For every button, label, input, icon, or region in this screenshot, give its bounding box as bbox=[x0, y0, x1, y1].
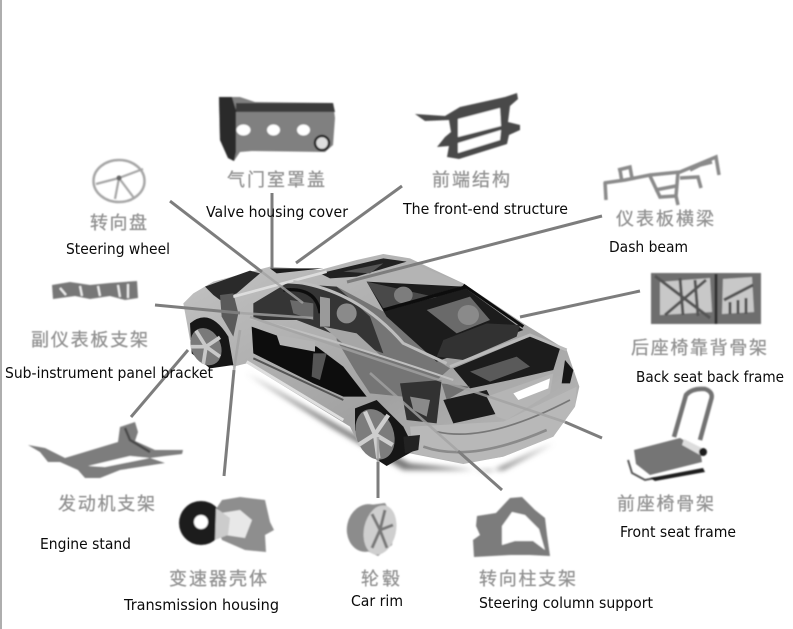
label: dash beam en: Dash beam bbox=[609, 238, 688, 256]
tail light bbox=[443, 390, 498, 423]
trunk opening bbox=[453, 337, 560, 388]
label: dash beam zh: 仪表板横梁 bbox=[616, 209, 714, 229]
licence plate bbox=[513, 378, 550, 400]
engine bay bbox=[205, 271, 260, 300]
glass pillar bbox=[293, 282, 447, 363]
rear wheel bbox=[349, 400, 420, 466]
label: engine stand zh: 发动机支架 bbox=[58, 494, 155, 514]
ground shadow bbox=[247, 373, 553, 472]
side glass tone bbox=[337, 287, 450, 397]
label: front-end structure en: The front-end structure bbox=[402, 200, 568, 218]
label: steering wheel zh: 转向盘 bbox=[90, 213, 147, 233]
car cutaway illustration bbox=[183, 254, 579, 472]
label: car rim zh: 轮毂 bbox=[361, 569, 400, 589]
label: car rim en: Car rim bbox=[351, 592, 403, 610]
rear cabin interior bbox=[367, 282, 523, 362]
label: steering column support zh: 转向柱支架 bbox=[479, 569, 576, 589]
part: dash beam bbox=[604, 157, 719, 205]
label: steering column support en: Steering column support bbox=[479, 594, 653, 612]
sunroof bbox=[320, 258, 407, 278]
label: valve housing cover zh: 气门室罩盖 bbox=[227, 170, 325, 190]
part: sub-instrument panel bracket bbox=[52, 281, 138, 300]
label: transmission housing zh: 变速器壳体 bbox=[169, 569, 267, 589]
label: front seat frame zh: 前座椅骨架 bbox=[617, 494, 714, 514]
label: front-end structure zh: 前端结构 bbox=[432, 170, 510, 190]
label: steering wheel en: Steering wheel bbox=[66, 240, 170, 258]
part: car rim bbox=[342, 500, 401, 558]
rear bumper bbox=[410, 387, 577, 463]
rear wheel arch components bbox=[400, 380, 442, 423]
label: front seat frame en: Front seat frame bbox=[620, 523, 736, 541]
leader lines bbox=[131, 186, 640, 498]
label: engine stand en: Engine stand bbox=[40, 535, 131, 553]
car body bbox=[183, 254, 579, 464]
label: valve housing cover en: Valve housing cover bbox=[206, 203, 349, 221]
label: sub-instrument panel bracket en: Sub-instrument panel bracket bbox=[5, 364, 213, 382]
label: back seat back frame zh: 后座椅靠背骨架 bbox=[631, 338, 767, 358]
part: engine stand bbox=[28, 422, 183, 478]
part: front seat frame bbox=[628, 389, 712, 481]
part: valve housing cover bbox=[219, 97, 335, 161]
part: transmission housing bbox=[179, 497, 274, 552]
part: back seat back frame bbox=[651, 273, 761, 324]
part: front-end structure bbox=[415, 93, 520, 159]
label: sub-instrument panel bracket zh: 副仪表板支架 bbox=[31, 330, 148, 350]
label: transmission housing en: Transmission housing bbox=[123, 596, 279, 614]
rear window glass bbox=[370, 263, 463, 297]
lower cabin and door sill bbox=[252, 327, 367, 397]
front cabin interior bbox=[253, 283, 383, 353]
part: steering wheel bbox=[94, 160, 144, 202]
part: steering column support bbox=[473, 497, 550, 557]
front wheel bbox=[185, 317, 233, 370]
